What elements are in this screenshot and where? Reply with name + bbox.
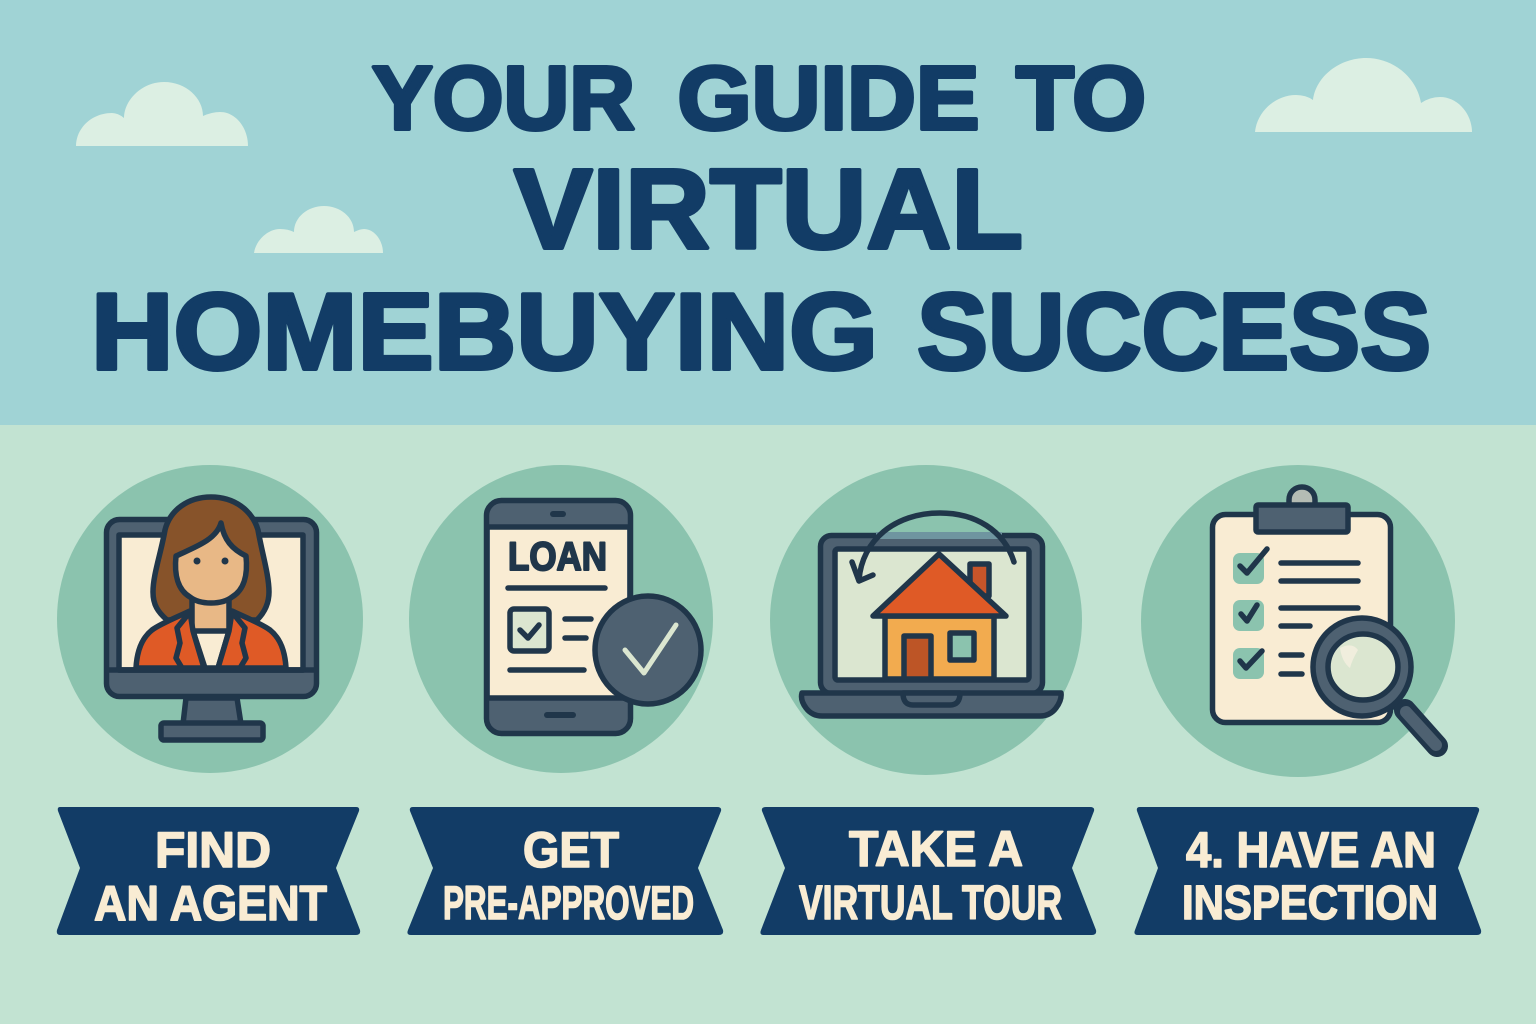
icon: monitor with agent [106,497,316,740]
phone body [486,500,630,734]
step 2: get pre-approved [407,465,723,935]
LOAN label: LOAN [508,535,607,579]
monitor base [161,723,263,740]
walls [885,616,994,679]
lens frame [1313,618,1411,716]
title [91,49,1431,393]
cloud: top right [1255,58,1472,132]
shirt [193,631,229,668]
lapel right [218,612,246,668]
line 2: INSPECTION [1182,877,1438,930]
window [950,633,974,660]
banner [760,807,1096,935]
form line [508,585,605,591]
badge check [625,625,676,673]
banner text [443,822,694,929]
clip [1256,505,1348,532]
checkbox [510,609,549,651]
form lines [510,619,591,670]
magnifier [1313,618,1437,746]
step 4: have an inspection [1134,465,1481,935]
icon circle [57,465,363,773]
monitor screen [119,535,303,670]
monitor chin divider [107,667,316,673]
line 2: AN AGENT [94,877,327,931]
banner [1134,807,1481,935]
handle fill [1406,712,1436,745]
laptop notch [903,693,960,705]
door [904,636,931,679]
line 2: VIRTUAL TOUR [799,877,1062,930]
checkbox tick [520,625,539,638]
house [873,554,1006,679]
cloud: top left [76,82,248,146]
ticks [1240,549,1267,668]
word: homebuying: HOMEBUYING [91,271,878,393]
clip knob [1289,487,1315,506]
check boxes [1233,553,1264,679]
word: success: SUCCESS [917,271,1431,393]
checklist [1233,549,1358,679]
chimney [970,564,989,596]
rotate arrow [852,513,1014,581]
lens glare [1340,645,1358,668]
icon circle [770,465,1082,775]
banner [57,807,360,935]
arrow head [852,562,873,581]
screen bottom line [119,667,303,673]
neck [192,596,229,632]
title line 2: VIRTUAL [514,146,1023,272]
banner text [1182,822,1438,930]
agent figure [119,497,303,670]
roof [873,554,1006,616]
line 1: TAKE A [849,821,1023,877]
lapel left [176,612,204,668]
arc [859,513,1014,580]
jacket [136,611,286,668]
line 1: FIND [155,822,271,878]
line 1: 4. HAVE AN [1186,822,1436,878]
word: guide: GUIDE [678,49,980,149]
screen borders [488,527,629,698]
line 2: PRE-APPROVED [443,876,694,929]
icon circle [409,465,713,773]
laptop base [802,693,1061,716]
lens [1328,634,1398,700]
banner text [94,822,327,931]
lid top gap behind arc [876,532,1002,539]
banner text [799,821,1062,930]
title line 3 [91,271,1431,393]
phone screen [490,528,627,697]
badge [595,596,701,704]
word: your: YOUR [372,49,635,149]
icon: phone with loan form [486,500,701,734]
word: to: TO [1016,49,1146,149]
panel: ground [0,425,1536,1024]
step 1: find an agent [57,465,363,935]
cloud: small centre left [254,206,383,253]
title line 1 [372,49,1146,149]
hair [153,497,269,620]
clipboard [1212,514,1390,722]
banner [407,807,723,935]
handle connector [1391,698,1402,710]
monitor stand [183,698,241,724]
handle [1405,710,1437,746]
face [176,523,246,603]
step 3: take a virtual tour [760,465,1096,935]
icon: clipboard with magnifier [1212,487,1437,746]
panel: sky header [0,0,1536,425]
icon: laptop with house [802,513,1061,716]
eyes [194,558,228,564]
line 1: GET [523,822,619,878]
laptop lid [820,536,1042,694]
monitor body [106,520,316,696]
icon circle [1141,465,1455,777]
laptop screen [835,549,1029,680]
home button [544,712,576,718]
speaker [550,511,566,517]
list lines [1281,563,1358,674]
